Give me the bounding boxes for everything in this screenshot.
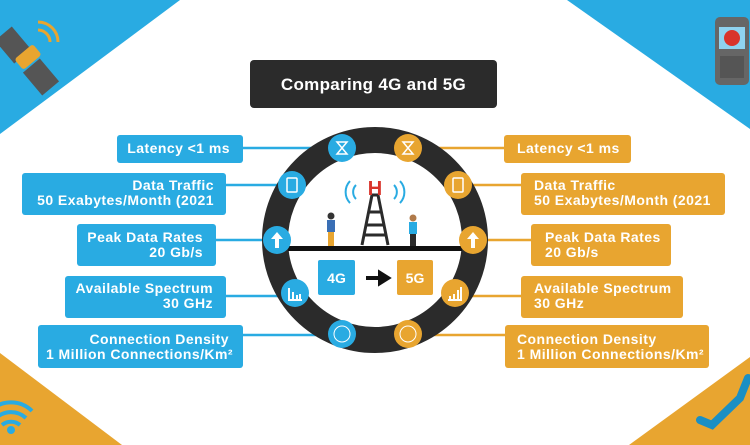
label: peak 4G: Peak Data Rates — [87, 229, 203, 245]
icon circles orange — [394, 134, 487, 348]
label: connection density 5G: Connection Density — [517, 331, 657, 347]
5G box: 5G — [406, 270, 424, 286]
label: spectrum 5G: Available Spectrum — [534, 280, 672, 296]
label: latency 5G: Latency <1 ms — [517, 140, 620, 156]
icon circles blue — [263, 134, 356, 348]
title: Comparing 4G and 5G — [281, 75, 466, 94]
icon: tower: H — [368, 178, 382, 200]
4G box — [318, 260, 355, 295]
corner: bottom-right orange — [629, 357, 750, 445]
corner: top-left blue — [0, 0, 180, 134]
label: data traffic 5G — [521, 173, 725, 215]
icon: mobile phone — [715, 17, 749, 85]
person: woman — [327, 212, 335, 246]
label: data traffic 4G: Data Traffic — [132, 177, 214, 193]
5G box — [397, 260, 433, 295]
label: connection density 4G: 1 Million Connections/Km² — [46, 346, 233, 362]
label: spectrum 5G — [521, 276, 683, 318]
label: peak 5G: 20 Gb/s — [545, 244, 599, 260]
label: connection density 5G: 1 Million Connections/Km² — [517, 346, 704, 362]
label: spectrum 5G: 30 GHz — [534, 295, 584, 311]
label: data traffic 4G: 50 Exabytes/Month (2021 — [37, 192, 214, 208]
label: connection density 5G — [505, 325, 709, 368]
corner: bottom-left orange — [0, 353, 122, 445]
label: data traffic 4G — [22, 173, 226, 215]
icon: satellite — [0, 22, 59, 96]
label: peak 4G: 20 Gb/s — [149, 244, 203, 260]
label: connection density 4G — [38, 325, 243, 368]
icon glyphs — [271, 142, 479, 342]
label: peak 5G — [531, 224, 671, 266]
label: latency 4G: Latency <1 ms — [127, 140, 230, 156]
icon: tower — [346, 178, 404, 245]
label: peak 4G — [77, 224, 216, 266]
arrow — [366, 273, 388, 283]
label: data traffic 5G: 50 Exabytes/Month (2021 — [534, 192, 711, 208]
ground bar — [288, 246, 462, 251]
corner: top-right blue — [567, 0, 750, 129]
icon: wifi — [0, 402, 32, 434]
icon: telephone handset — [700, 378, 748, 425]
label: latency 5G — [504, 135, 631, 163]
label: spectrum 4G: 30 GHz — [163, 295, 213, 311]
connector lines — [216, 148, 531, 335]
label: peak 5G: Peak Data Rates — [545, 229, 661, 245]
label: spectrum 4G — [65, 276, 226, 318]
label: latency 4G — [117, 135, 243, 163]
person: man — [409, 214, 417, 246]
label: data traffic 5G: Data Traffic — [534, 177, 616, 193]
label: connection density 4G: Connection Density — [89, 331, 229, 347]
4G box: 4G — [327, 270, 346, 286]
label: spectrum 4G: Available Spectrum — [75, 280, 213, 296]
ring — [275, 140, 475, 340]
title — [250, 60, 497, 108]
